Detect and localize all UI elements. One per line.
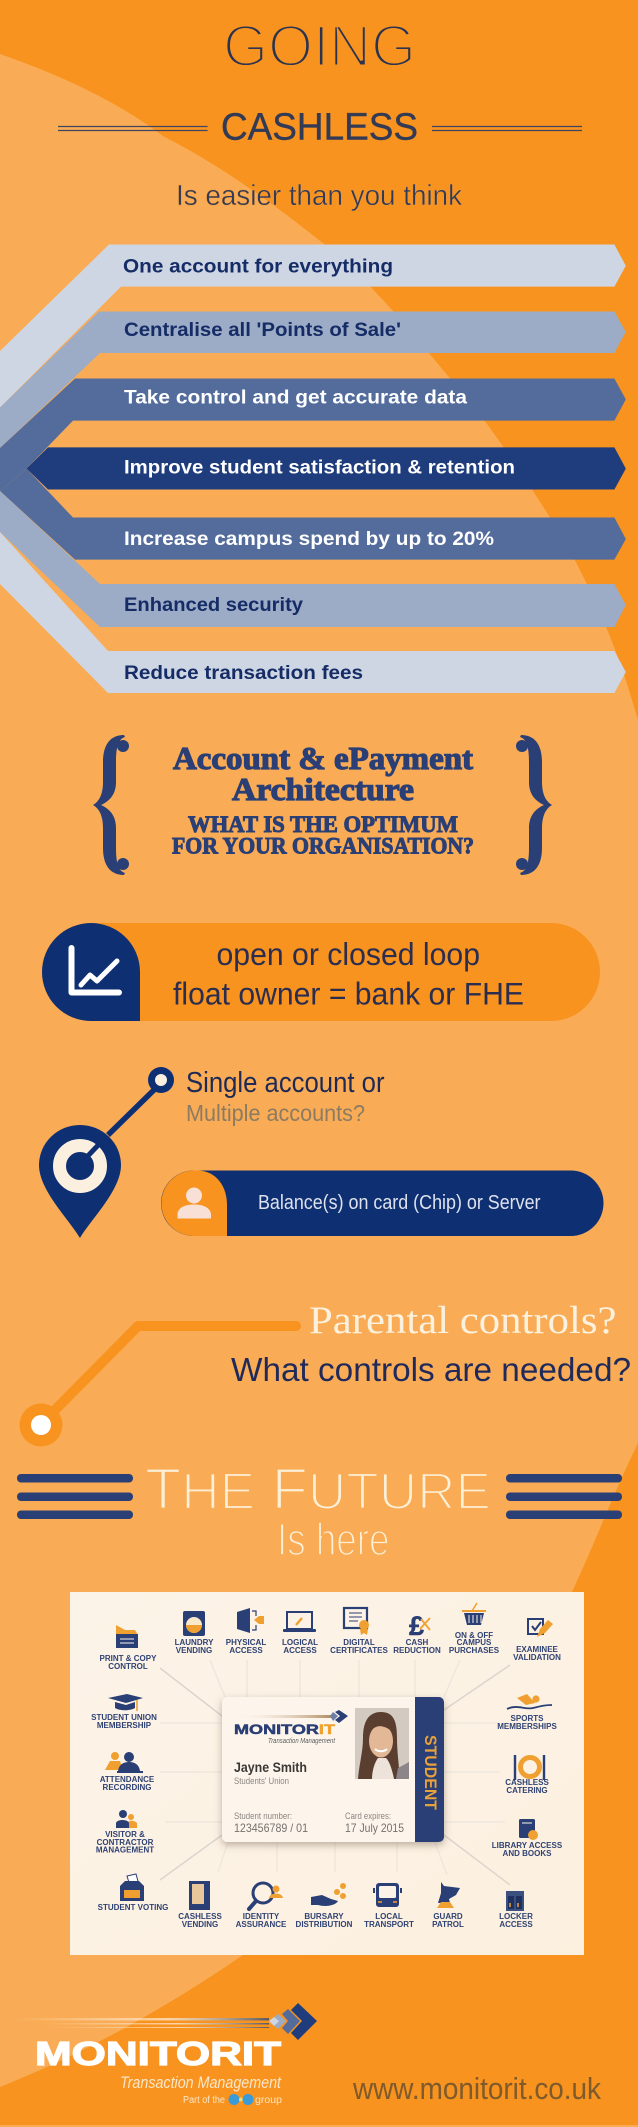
text: single or multiple accounts [186,1067,385,1126]
card student number: Student number: [234,1811,292,1821]
footer logo: Transaction Management [120,2073,282,2092]
service: visitor and contractor management: CONTRACTOR [97,1838,154,1847]
card name [234,1759,307,1786]
ribbon 4: Improve student satisfaction & retention [124,458,515,479]
ribbon 6 [0,491,626,627]
icon: location pin with connector [39,1067,174,1238]
title: going: GOING [223,14,416,79]
service: attendance recording: RECORDING [103,1783,151,1792]
service: cash reduction [393,1611,441,1655]
service: local transport: LOCAL [375,1912,403,1921]
service: student voting [98,1874,168,1912]
service: laundry vending: VENDING [176,1646,212,1655]
service: cashless catering: CASHLESS [505,1778,549,1787]
card name: Jayne Smith [234,1759,307,1775]
heading: account and epayment architecture: FOR YOUR ORGANISATION? [172,834,474,858]
service: on and off campus purchases: ON & OFF [455,1631,493,1640]
title: cashless with rules: CASHLESS [221,106,418,148]
title: cashless with rules [58,106,582,148]
ribbon 4 [26,447,626,490]
rules left of future [17,1474,133,1519]
service: logical access: ACCESS [283,1646,317,1655]
service: digital certificates: CERTIFICATES [330,1646,388,1655]
subtitle: Is easier than you think [176,180,462,212]
card name: Students' Union [234,1776,289,1786]
service: locker access: ACCESS [499,1920,533,1929]
footer logo [16,2003,317,2106]
footer logo: MONITORIT [35,2035,281,2072]
ribbon 5: Increase campus spend by up to 20% [124,529,494,550]
service: print and copy control [100,1625,157,1671]
rules right of future [506,1474,622,1519]
ribbon 3: Take control and get accurate data [124,388,467,408]
ribbon 7 [0,532,626,693]
service: visitor and contractor management [96,1810,154,1854]
service: identity assurance [236,1883,287,1929]
service: examinee validation: VALIDATION [513,1653,561,1662]
left brace [93,735,129,875]
service: examinee validation [513,1619,561,1662]
service: physical access [226,1608,266,1655]
card logo: MONITOR IT [234,1721,336,1737]
icon: person [161,1170,227,1236]
text: parental controls: Parental controls? [309,1299,616,1342]
service: identity assurance: IDENTITY [243,1912,280,1921]
ribbon 1: One account for everything [123,257,393,278]
service: attendance recording [100,1752,155,1792]
card student stripe: STUDENT [421,1735,440,1811]
service: guard patrol: GUARD [433,1912,463,1921]
ribbon 3 [0,378,626,491]
heading: account and epayment architecture: WHAT IS THE OPTIMUM [188,812,458,837]
service: print and copy control: CONTROL [108,1662,148,1671]
connector: parental controls [20,1326,296,1446]
pill: balance on card or server [161,1170,604,1236]
card expiry [345,1811,404,1835]
service: print and copy control: PRINT & COPY [100,1654,157,1663]
card student number [234,1811,308,1835]
card logo: Transaction Management [268,1736,336,1745]
service: sports memberships: SPORTS [511,1714,544,1723]
service: local transport: TRANSPORT [364,1920,414,1929]
service: digital certificates [330,1608,388,1655]
service: student union membership: STUDENT UNION [91,1713,157,1722]
service: attendance recording: ATTENDANCE [100,1775,155,1784]
service: locker access [499,1891,533,1929]
website url: www.monitorit.co.uk [352,2071,601,2106]
pill: open or closed loop: float owner = bank or FHE [173,976,524,1012]
service: sports memberships: MEMBERSHIPS [497,1722,557,1731]
heading: the future: THE FUTURE [145,1457,491,1522]
service: bursary distribution: DISTRIBUTION [296,1920,353,1929]
service: cashless vending: CASHLESS [178,1912,222,1921]
service: identity assurance: ASSURANCE [236,1920,287,1929]
ribbon 6: Enhanced security [124,595,303,616]
card photo [355,1708,409,1779]
pill: balance on card or server: Balance(s) on card (Chip) or Server [258,1192,541,1214]
card logo [233,1710,348,1745]
ribbon 1 [0,244,626,408]
service: library access and books: LIBRARY ACCESS [492,1841,563,1850]
service: guard patrol: PATROL [432,1920,464,1929]
footer logo: group [255,2095,282,2106]
service: bursary distribution [296,1883,353,1929]
service: locker access: LOCKER [499,1912,533,1921]
service: local transport [364,1883,414,1929]
heading: account and epayment architecture [172,740,474,858]
ribbon 2 [0,312,626,448]
card student number: 123456789 / 01 [234,1821,308,1835]
right brace [516,735,552,875]
service: library access and books: AND BOOKS [503,1849,552,1858]
ribbon list [0,244,626,693]
service: student voting: STUDENT VOTING [98,1903,168,1912]
service: on and off campus purchases [449,1603,500,1655]
service: logical access: LOGICAL [282,1638,318,1647]
heading: account and epayment architecture: Architecture [232,771,414,807]
service: bursary distribution: BURSARY [304,1912,344,1921]
card expiry: 17 July 2015 [345,1821,404,1835]
service: student union membership [91,1694,157,1730]
text: what controls are needed: What controls are needed? [231,1352,631,1389]
service: cash reduction: £ [409,1611,424,1641]
service: cashless catering: CATERING [506,1786,548,1795]
service: digital certificates: DIGITAL [343,1638,375,1647]
service: cashless catering [505,1755,549,1795]
pill: open or closed loop: open or closed loop [216,936,480,972]
service: laundry vending: LAUNDRY [175,1638,214,1647]
service: on and off campus purchases: CAMPUS [457,1638,492,1647]
service: visitor and contractor management: VISITOR & [105,1830,145,1839]
service: guard patrol [432,1882,464,1929]
service: visitor and contractor management: MANAGEMENT [96,1846,154,1854]
service: physical access: ACCESS [229,1646,263,1655]
ribbon 2: Centralise all 'Points of Sale' [124,320,401,341]
text: single or multiple accounts: Single account or [186,1067,385,1099]
service: examinee validation: EXAMINEE [516,1645,559,1654]
ribbon 5 [0,469,626,560]
panel: cashless card services [70,1592,584,1955]
ribbon 7: Reduce transaction fees [124,663,363,684]
card student stripe [415,1697,444,1842]
id card [222,1697,444,1842]
service: on and off campus purchases: PURCHASES [449,1646,500,1655]
text: single or multiple accounts: Multiple accounts? [186,1100,365,1126]
service: library access and books [492,1819,563,1858]
service: laundry vending [175,1611,214,1655]
pill: open or closed loop [42,923,600,1021]
heading: is here: Is here [277,1514,390,1565]
service: sports memberships [497,1694,557,1731]
footer logo: Part of the [183,2095,225,2106]
service: cash reduction: CASH [406,1638,429,1647]
card expiry: Card expires: [345,1811,391,1821]
service: logical access [282,1612,318,1655]
heading: account and epayment architecture: Account & ePayment [173,740,473,776]
service: cashless vending: VENDING [182,1920,218,1929]
service: cash reduction: REDUCTION [393,1646,441,1655]
service: physical access: PHYSICAL [226,1638,266,1647]
service: cashless vending [178,1881,222,1929]
service: student union membership: MEMBERSHIP [97,1721,152,1730]
icon: line chart [42,923,140,1021]
